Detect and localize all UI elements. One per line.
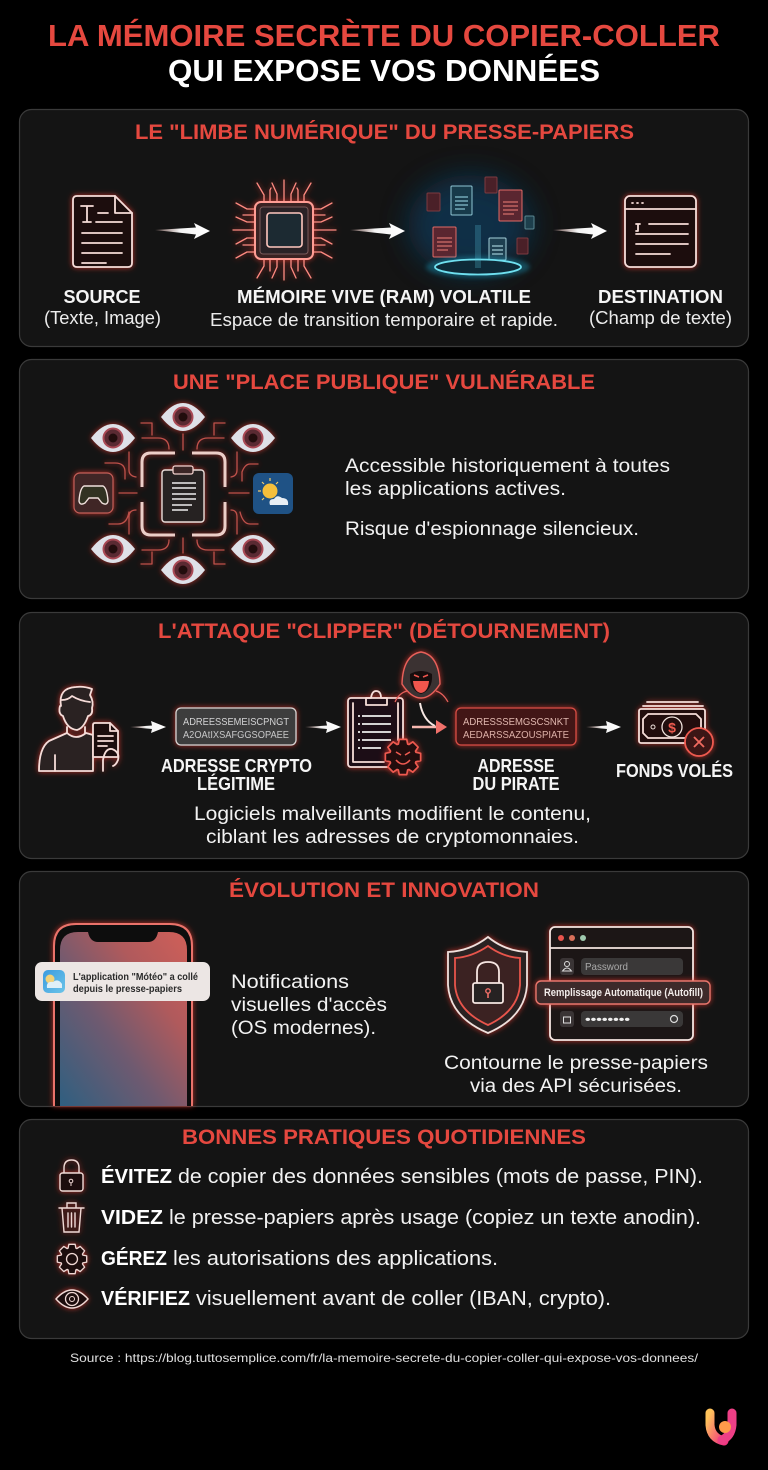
title: QUI EXPOSE VOS DONNÉES [168, 53, 600, 88]
label: legitimate address: ADRESSE CRYPTO [161, 756, 312, 776]
arrow: to legit address [130, 721, 166, 733]
tip: gérez: les autorisations des applications. [173, 1248, 498, 1270]
title [48, 18, 720, 88]
caption: clipper: ciblant les adresses de cryptomonnaies. [206, 827, 579, 848]
icon: user with document [39, 687, 118, 771]
text: autofill caption [444, 1053, 708, 1097]
box: legitimate address: ADREESSEMEISCPNGT [183, 716, 290, 728]
title: LA MÉMOIRE SECRÈTE DU COPIER-COLLER [48, 18, 720, 53]
label: pirate address [472, 756, 560, 794]
icon: weather app [253, 473, 293, 514]
panel: bonnes pratiques [20, 1120, 748, 1338]
text: vulnerability [345, 456, 670, 540]
source line: Source : https://blog.tuttosemplice.com/fr/la-memoire-secrete-du-copier-coller-qui-expose-vos-donnees/ [70, 1351, 699, 1365]
icon: hooded hacker [395, 652, 448, 702]
panel: place publique [20, 360, 748, 598]
heading: bonnes pratiques: BONNES PRATIQUES QUOTIDIENNES [182, 1126, 586, 1149]
text: notifications: Notifications [231, 972, 349, 993]
box: pirate address [456, 708, 576, 745]
button: autofill: Remplissage Automatique (Autofill) [544, 987, 703, 999]
icon: eye lower right [231, 535, 275, 563]
tip: évitez: de copier des données sensibles (mots de passe, PIN). [178, 1166, 703, 1188]
caption: clipper [194, 804, 591, 848]
icon: eye [56, 1290, 88, 1308]
text: notifications [231, 972, 387, 1039]
heading: limbe numérique: LE "LIMBE NUMÉRIQUE" DU PRESSE-PAPIERS [135, 121, 634, 144]
button: autofill [536, 981, 710, 1004]
text: vulnerability: Accessible historiquement à toutes [345, 456, 670, 477]
icon: RAM chip [233, 180, 336, 280]
tip: évitez: ÉVITEZ [101, 1165, 172, 1188]
label: pirate address: ADRESSE [478, 756, 554, 776]
icon: clipboard [162, 466, 204, 522]
logo [710, 1413, 732, 1441]
arrow: RAM to files [350, 223, 405, 239]
label: RAM: MÉMOIRE VIVE (RAM) VOLATILE [237, 286, 531, 307]
label: legitimate address: LÉGITIME [197, 773, 275, 794]
text: autofill caption: via des API sécurisées. [470, 1076, 682, 1097]
label: legitimate address [161, 756, 312, 794]
arrow: source to RAM [155, 223, 210, 239]
icon: trash [59, 1203, 84, 1232]
autofill window: •••••••• [585, 1014, 630, 1026]
label: pirate address: DU PIRATE [472, 774, 560, 794]
text: notifications: visuelles d'accès [231, 995, 387, 1016]
label: source: SOURCE [64, 287, 140, 307]
icon: eye top [161, 403, 205, 431]
label: destination: DESTINATION [598, 287, 723, 307]
arrow: to clipboard [305, 721, 341, 733]
notification: Météo: depuis le presse-papiers [73, 983, 182, 995]
diagram: eyes watching clipboard [74, 403, 293, 584]
icon: stolen money: $ [668, 720, 676, 736]
text: vulnerability: Risque d'espionnage silencieux. [345, 519, 639, 540]
text: notifications: (OS modernes). [231, 1018, 376, 1039]
icon: lock [60, 1160, 83, 1191]
arrow: hacker swap [412, 703, 447, 734]
autofill window: Password [585, 961, 628, 973]
icon: malicious gear [385, 739, 421, 775]
heading: évolution: ÉVOLUTION ET INNOVATION [229, 879, 539, 902]
caption: clipper: Logiciels malveillants modifient le contenu, [194, 804, 591, 825]
heading: clipper: L'ATTAQUE "CLIPPER" (DÉTOURNEMENT) [158, 620, 610, 643]
icon: infected clipboard [348, 691, 403, 767]
phone mockup [35, 924, 210, 1106]
icon: destination window [625, 196, 696, 267]
text: autofill caption: Contourne le presse-papiers [444, 1053, 708, 1074]
icon: eye upper left [91, 424, 135, 452]
icon: source document [73, 196, 132, 267]
arrow: files to destination [553, 223, 607, 239]
label: destination [589, 287, 732, 328]
box: legitimate address: A2OAtIXSAFGGSOPAEE [183, 729, 289, 741]
arrow: to stolen funds [586, 721, 621, 733]
notification: Météo [35, 962, 210, 1001]
tip: vérifiez: visuellement avant de coller (IBAN, crypto). [196, 1288, 611, 1310]
label: source: (Texte, Image) [44, 308, 161, 328]
notification: Météo: L'application "Mótéo" a collé [73, 971, 198, 983]
panel: attaque clipper [20, 612, 748, 858]
text: vulnerability: les applications actives. [345, 479, 566, 500]
label: RAM [210, 286, 558, 330]
icon: gear [57, 1244, 87, 1274]
icon: volatile floating documents [408, 175, 534, 278]
tip: videz: le presse-papiers après usage (copiez un texte anodin). [169, 1207, 701, 1229]
icon: stolen money [639, 702, 713, 756]
icon: eye upper right [231, 424, 275, 452]
box: legitimate address [176, 708, 296, 745]
tip: videz: VIDEZ [101, 1207, 163, 1229]
panel: limbe numérique [20, 110, 748, 346]
label: stolen funds: FONDS VOLÉS [616, 760, 733, 781]
tip: vérifiez: VÉRIFIEZ [101, 1287, 190, 1310]
heading: place publique: UNE "PLACE PUBLIQUE" VULNÉRABLE [173, 371, 595, 394]
autofill window [536, 927, 710, 1040]
box: pirate address: ADRESSSEMGSCSNKT [463, 716, 570, 728]
label: RAM: Espace de transition temporaire et rapide. [210, 310, 558, 330]
label: source [44, 287, 161, 328]
label: destination: (Champ de texte) [589, 308, 732, 328]
icon: game controller app [74, 473, 113, 513]
icon: eye lower left [91, 535, 135, 563]
box: pirate address: AEDARSSAZOUSPIATE [463, 729, 569, 741]
icon: eye bottom [161, 556, 205, 584]
icon: shield with lock [448, 937, 527, 1033]
tip: gérez: GÉREZ [101, 1247, 167, 1270]
panel: évolution [20, 872, 748, 1106]
